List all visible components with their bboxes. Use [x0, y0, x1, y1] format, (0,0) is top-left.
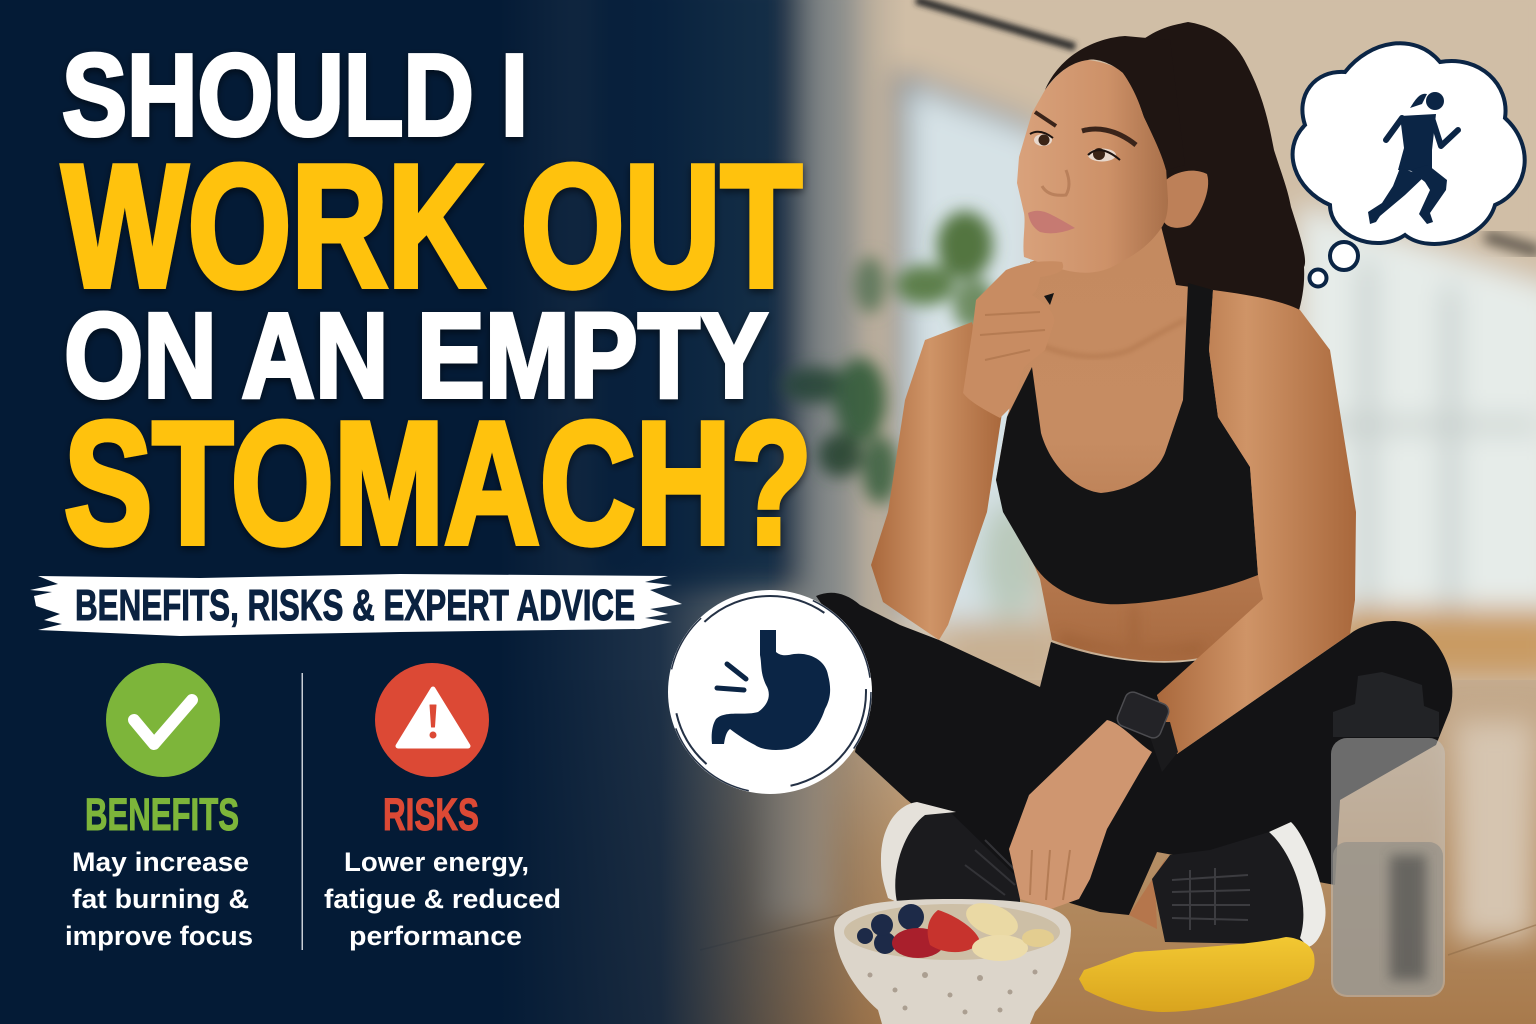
bowl speckles — [868, 970, 1038, 1014]
icon: red warning — [375, 663, 489, 777]
icon: runner — [1368, 92, 1458, 224]
chest and abdomen — [996, 222, 1274, 661]
icon: stomach — [712, 630, 830, 750]
fruit bowl — [834, 897, 1071, 1024]
left strap — [1044, 293, 1054, 305]
black sports bra — [996, 283, 1258, 604]
thought bubble with runner — [1293, 43, 1525, 286]
abdominal shading — [1060, 605, 1205, 655]
hairline — [1045, 36, 1185, 170]
right shoe — [1152, 822, 1326, 947]
face — [1017, 60, 1168, 273]
left arm — [871, 322, 1002, 640]
risks text: Lower energy, — [344, 847, 529, 877]
eyes, brows, nose and lips — [1028, 112, 1136, 233]
risks text: performance — [349, 921, 522, 951]
right arm — [1157, 290, 1356, 754]
risks text: fatigue & reduced — [324, 884, 561, 914]
benefits text: May increase — [72, 847, 249, 877]
stomach badge — [668, 590, 872, 794]
smartwatch — [1115, 690, 1178, 772]
banana — [1079, 937, 1315, 1012]
subtitle brush banner: BENEFITS, RISKS & EXPERT ADVICE — [75, 581, 635, 630]
blurred plant — [781, 211, 997, 504]
collarbone shading — [1040, 320, 1185, 356]
icon: green check — [106, 663, 220, 777]
ear — [1164, 171, 1208, 228]
left shoe — [881, 802, 1020, 902]
benefits text — [65, 847, 253, 951]
water bottle — [1331, 672, 1445, 997]
right hand — [1009, 720, 1152, 909]
title: STOMACH? — [64, 385, 812, 580]
ponytail — [1120, 22, 1305, 314]
title — [62, 30, 812, 580]
risks heading: RISKS — [383, 789, 479, 840]
benefits text: improve focus — [65, 921, 253, 951]
benefits text: fat burning & — [72, 884, 249, 914]
black leggings — [816, 593, 1452, 915]
title: SHOULD I — [62, 30, 528, 160]
risks column — [324, 663, 561, 951]
risks text — [324, 847, 561, 951]
benefits heading: BENEFITS — [85, 789, 239, 840]
icon: stomach rumble lines — [717, 664, 746, 690]
title: WORK OUT — [62, 128, 802, 323]
hand at chin — [963, 261, 1063, 418]
title: ON AN EMPTY — [64, 287, 768, 423]
benefits column — [65, 663, 253, 951]
subtitle brush banner — [30, 574, 682, 636]
woman sitting cross-legged — [816, 22, 1452, 947]
ankle — [1129, 855, 1168, 929]
knuckle shading — [980, 312, 1045, 360]
